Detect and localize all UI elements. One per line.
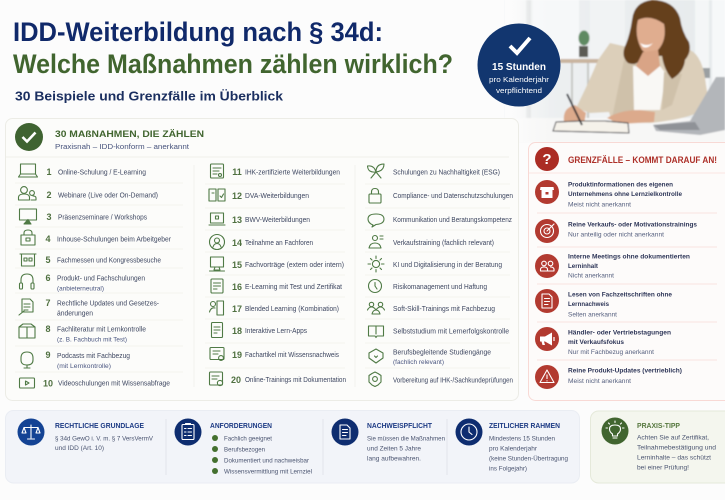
icon: open book (209, 189, 225, 201)
item 7 (19, 298, 160, 318)
item 15: Fachvorträge (extern oder intern) (245, 262, 344, 269)
item 5: Fachmessen und Kongressbesuche (57, 258, 161, 264)
block: Anforderungen: ANFORDERUNGEN (210, 421, 272, 430)
text: Praxis-Tipp: bei einer Prüfung! (637, 464, 689, 472)
item 16: E-Learning mit Test und Zertifikat (245, 284, 342, 291)
case 6: Reine Produkt-Updates (vertrieblich) (568, 368, 682, 374)
item 5: 5 (45, 255, 51, 265)
case 5: Nur mit Fachbezug anerkannt (568, 349, 654, 356)
item: soft skills (368, 302, 495, 314)
icon: open book (368, 326, 384, 338)
item: AI: KI und Digitalisierung in der Beratung (393, 262, 502, 269)
item 1 (18, 164, 146, 177)
item: self study (368, 326, 509, 338)
icon: padlock (369, 188, 381, 203)
item 19 (210, 348, 339, 360)
icon: forum (210, 234, 224, 250)
icon: group of people (368, 302, 384, 314)
item: communication: Kommunikation und Beratungskompetenz (393, 217, 512, 224)
case 3: Lerninhalt (568, 263, 599, 270)
header: Grenzfälle: ? (542, 151, 552, 168)
item 14: 14 (232, 238, 242, 248)
subtitle: 30 Beispiele und Grenzfälle im Überblick (15, 88, 284, 104)
block: Zeitlicher Rahmen: ins Folgejahr) (489, 466, 527, 472)
block: Anforderungen: Fachlich geeignet (224, 436, 272, 442)
case 2: Reine Verkaufs- oder Motivationstrainings (568, 222, 697, 228)
item 11: IHK-zertifizierte Weiterbildungen (245, 170, 340, 176)
item: sales training (369, 236, 494, 248)
block: Nachweispflicht: lang aufbewahren. (367, 456, 421, 462)
item: degree programmes: Berufsbegleitende Studiengänge (393, 350, 491, 356)
block: Rechtliche Grundlage: RECHTLICHE GRUNDLAGE (55, 421, 144, 430)
item: risk: Risikomanagement und Haftung (393, 284, 487, 291)
case 5: Händler- oder Vertriebstagungen (568, 330, 671, 336)
icon: document with pen (19, 299, 33, 315)
item 13: 13 (232, 215, 242, 225)
item: ESG (368, 164, 500, 178)
column 1 (18, 164, 172, 388)
block: Rechtliche Grundlage: § 34d GewO i. V. m. § 7 VersVermV (55, 436, 153, 442)
title: IDD-Weiterbildung nach § 34d: (13, 17, 383, 47)
block: Zeitlicher Rahmen (456, 418, 568, 472)
badge: 15 Stunden (478, 24, 560, 106)
item 6 (20, 273, 145, 292)
item 20: 20 (231, 375, 241, 385)
item 10: 10 (43, 378, 53, 388)
header: Grenzfälle (535, 147, 717, 171)
icon: podcast headset (21, 352, 33, 368)
icon: app (212, 322, 222, 338)
item: risk (368, 280, 487, 292)
item: AI (368, 256, 502, 272)
icon: tablet (209, 213, 225, 225)
case 3 (535, 254, 690, 280)
item: exam preparation: Vorbereitung auf IHK-/Sachkundeprüfungen (393, 378, 513, 384)
icon: leaves (368, 164, 384, 178)
item 6: (anbieterneutral) (57, 286, 104, 292)
item 12: DVA-Weiterbildungen (245, 193, 309, 200)
case 6 (535, 365, 682, 389)
item 7: 7 (45, 298, 51, 308)
item 18 (212, 322, 307, 338)
item: degree programmes: (fachlich relevant) (393, 359, 444, 366)
item 9 (21, 350, 130, 370)
item 3: 3 (46, 212, 52, 222)
panel header: 30 MAßNAHMEN, DIE ZÄHLEN (55, 129, 204, 140)
item 6: Produkt- und Fachschulungen (57, 276, 145, 282)
case 4: Lesen von Fachzeitschriften ohne (568, 292, 672, 298)
text: Praxis-Tipp: Lerninhalte – das schützt (637, 454, 711, 462)
title (13, 17, 453, 79)
block: Anforderungen: Berufsbezogen (224, 446, 265, 454)
icon: warning triangle (535, 365, 559, 389)
icon: checklist (174, 418, 202, 446)
item 9: (mit Lernkontrolle) (57, 363, 111, 370)
icon: light bulb (602, 418, 628, 444)
icon: book (19, 324, 35, 338)
block: Nachweispflicht: Sie müssen die Maßnahmen (367, 436, 445, 442)
item 12: 12 (232, 191, 242, 201)
case 6: Meist nicht anerkannt (568, 378, 631, 385)
item 7: änderungen (57, 310, 93, 318)
panel: bottom information bar (6, 410, 580, 483)
block: Rechtliche Grundlage (18, 418, 153, 452)
item: compliance (369, 188, 513, 203)
text: Praxis-Tipp: PRAXIS-TIPP (637, 421, 680, 430)
item 20 (210, 372, 346, 386)
item 17 (210, 301, 339, 315)
icon: people (535, 254, 559, 278)
column 3 (368, 164, 513, 386)
icon: building (21, 230, 35, 245)
block: Rechtliche Grundlage: und IDD (Art. 10) (55, 445, 104, 452)
block: Zeitlicher Rahmen: pro Kalenderjahr (489, 446, 538, 452)
item 8: 8 (45, 324, 51, 334)
item 3 (20, 209, 147, 224)
item 4: 4 (45, 234, 51, 244)
item 17: 17 (232, 304, 242, 314)
item 16 (211, 279, 342, 293)
badge: 15 Stunden: verpflichtend (496, 88, 542, 95)
block: Anforderungen: Wissensvermittlung mit Lernziel (224, 468, 312, 476)
icon: people (18, 187, 36, 200)
icon: test sheet (211, 279, 223, 293)
block: Nachweispflicht (332, 418, 445, 462)
case 5 (535, 327, 671, 356)
case 1: Produktinformationen des eigenen (568, 182, 673, 188)
icon: document (332, 418, 358, 446)
panel: Grenzfälle (528, 142, 725, 400)
item 16: 16 (232, 282, 242, 292)
item 14 (210, 234, 313, 250)
item 20: Online-Trainings mit Dokumentation (245, 377, 346, 384)
badge: 15 Stunden: 15 Stunden (492, 61, 546, 73)
panel: Praxis-Tipp (590, 411, 725, 483)
icon: headset (20, 274, 34, 289)
icon: speech bubble (368, 214, 384, 227)
item 13 (209, 213, 310, 225)
block: Zeitlicher Rahmen: (keine Stunden-Übertragung (489, 454, 568, 462)
item 11 (210, 164, 340, 178)
block: Nachweispflicht: NACHWEISPFLICHT (367, 421, 432, 430)
panel header: Praxisnah – IDD-konform – anerkannt (55, 142, 189, 151)
item 2: Webinare (Live oder On-Demand) (58, 192, 158, 200)
panel: 30 Maßnahmen (6, 118, 518, 400)
icon: clock (456, 418, 482, 446)
icon: scales (18, 418, 44, 446)
case 1: Meist nicht anerkannt (568, 202, 631, 208)
item 4: Inhouse-Schulungen beim Arbeitgeber (57, 236, 172, 244)
case 3: Interne Meetings ohne dokumentierten (568, 254, 690, 260)
block: Nachweispflicht: und Zeiten 5 Jahre (367, 446, 421, 452)
case 4: Lernnachweis (568, 301, 609, 308)
item 19: Fachartikel mit Wissensnachweis (245, 352, 339, 359)
item 18: Interaktive Lern-Apps (245, 328, 307, 335)
item: compliance: Compliance- und Datenschutzschulungen (393, 193, 513, 200)
item 10 (20, 378, 170, 388)
text: Praxis-Tipp: Teilnahmebestätigung und (637, 444, 716, 452)
item 14: Teilnahme an Fachforen (245, 240, 313, 247)
block: Zeitlicher Rahmen: ZEITLICHER RAHMEN (489, 421, 560, 430)
item 9: 9 (45, 350, 51, 360)
icon: shop (535, 180, 559, 204)
column 2 (209, 164, 346, 386)
item: sales training: Verkaufstraining (fachlich relevant) (393, 240, 494, 247)
item 2 (18, 187, 158, 200)
item 18: 18 (232, 326, 242, 336)
item 5 (20, 254, 161, 266)
item 10: Videoschulungen mit Wissensabfrage (58, 380, 170, 388)
item 8: (z. B. Fachbuch mit Test) (57, 336, 127, 344)
item 15: 15 (232, 260, 242, 270)
panel header (15, 123, 204, 151)
icon: sun chip (368, 256, 384, 272)
item 6: 6 (45, 273, 51, 283)
case 1: Unternehmens ohne Lernzielkontrolle (568, 191, 682, 198)
icon: presentation screen (20, 209, 36, 224)
block: Anforderungen (174, 418, 312, 476)
text: Praxis-Tipp: Achten Sie auf Zertifikat, (637, 434, 709, 442)
case 1 (535, 180, 682, 208)
case 3: Nicht anerkannt (568, 272, 614, 280)
icon: certificate (210, 164, 224, 178)
item 3: Präsenzseminare / Workshops (58, 214, 147, 222)
item 11: 11 (232, 167, 242, 177)
icon: video (20, 378, 34, 388)
case 4: Selten anerkannt (568, 312, 617, 318)
icon: article with seal (210, 348, 224, 360)
case 2: Nur anteilig oder nicht anerkannt (568, 232, 664, 238)
item 8 (19, 324, 146, 344)
icon: sales group (369, 236, 383, 248)
case 5: mit Verkaufsfokus (568, 339, 624, 346)
text: Praxis-Tipp (637, 421, 716, 472)
item 13: BWV-Weiterbildungen (245, 217, 310, 224)
item 2: 2 (46, 190, 52, 200)
icon: laptop (18, 164, 38, 177)
case 4 (535, 289, 672, 318)
icon: clock (368, 280, 382, 292)
item 4 (21, 230, 172, 245)
icon: document with magnifier (210, 372, 223, 386)
item: exam preparation (369, 372, 513, 386)
item 12 (209, 189, 309, 201)
item 8: Fachliteratur mit Lernkontrolle (57, 326, 146, 334)
title: Welche Maßnahmen zählen wirklich? (13, 49, 453, 79)
item 19: 19 (232, 350, 242, 360)
photo: woman writing at desk (505, 0, 725, 142)
item 9: Podcasts mit Fachbezug (57, 353, 130, 360)
item 17: Blended Learning (Kombination) (245, 306, 339, 313)
item: communication (368, 214, 512, 227)
icon: blended learning (210, 301, 224, 315)
block: Anforderungen: Dokumentiert und nachweisbar (224, 458, 310, 464)
icon: monitor (210, 257, 224, 271)
item: ESG: Schulungen zu Nachhaltigkeit (ESG) (393, 170, 500, 176)
item: soft skills: Soft-Skill-Trainings mit Fachbezug (393, 306, 495, 313)
item: self study: Selbststudium mit Lernerfolgskontrolle (393, 328, 509, 336)
icon: trade fair booth (20, 254, 36, 266)
item 1: Online-Schulung / E-Learning (58, 170, 146, 176)
icon: gear (369, 372, 381, 386)
item 7: Rechtliche Updates und Gesetzes- (57, 300, 160, 308)
item 15 (210, 257, 344, 271)
item: degree programmes (369, 349, 491, 366)
icon: document (535, 289, 559, 313)
item 1: 1 (46, 167, 52, 177)
icon: shield badge (369, 349, 383, 363)
badge: 15 Stunden: pro Kalenderjahr (489, 75, 550, 84)
case 2 (535, 219, 697, 243)
block: Zeitlicher Rahmen: Mindestens 15 Stunden (489, 436, 555, 442)
icon: megaphone (535, 327, 559, 351)
icon: target (535, 219, 559, 243)
